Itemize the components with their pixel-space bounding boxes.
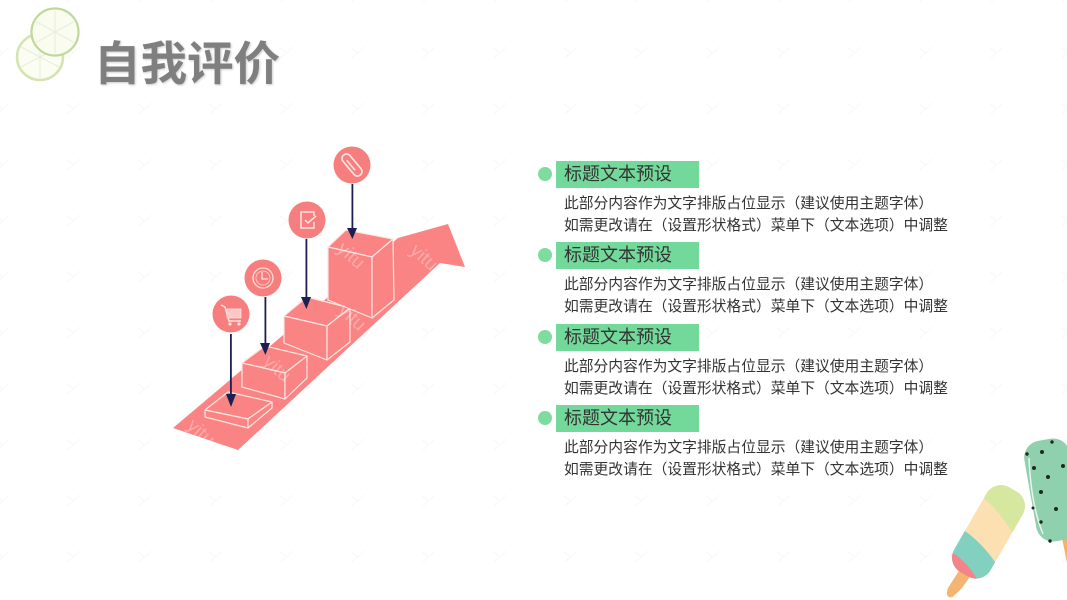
list item 2: 如需更改请在（设置形状格式）菜单下（文本选项）中调整 xyxy=(564,298,948,314)
list item 1: 如需更改请在（设置形状格式）菜单下（文本选项）中调整 xyxy=(564,218,948,234)
icon: popsicle right xyxy=(1021,436,1067,563)
icon: lime slices xyxy=(17,8,78,80)
list item 2: 标题文本预设 xyxy=(564,245,672,265)
pointer arrow 4 xyxy=(347,184,357,239)
pointer arrow 2 xyxy=(260,297,270,355)
list item 3: 此部分内容作为文字排版占位显示（建议使用主题字体） xyxy=(564,359,933,375)
watermarks: yitu xyxy=(406,240,442,276)
step 2 xyxy=(242,346,307,399)
watermarks: yitu xyxy=(334,300,370,336)
growth arrow with steps xyxy=(173,224,465,451)
icon: shopping cart xyxy=(212,296,250,332)
list item 2 xyxy=(538,242,948,314)
list item 3 xyxy=(538,324,948,396)
icon: checklist xyxy=(288,202,326,238)
icon: paperclip xyxy=(334,146,370,184)
pointer arrow 3 xyxy=(301,239,311,309)
step 4 xyxy=(328,230,394,318)
step 3 xyxy=(284,297,350,360)
watermarks: yitu xyxy=(333,238,369,274)
icon: clock xyxy=(244,260,282,296)
watermarks xyxy=(183,238,442,451)
list item 1: 此部分内容作为文字排版占位显示（建议使用主题字体） xyxy=(564,196,933,212)
watermarks: yitu xyxy=(183,415,219,451)
list item 4: 此部分内容作为文字排版占位显示（建议使用主题字体） xyxy=(564,440,933,456)
title: 自我评价 xyxy=(94,38,280,90)
list item 2: 此部分内容作为文字排版占位显示（建议使用主题字体） xyxy=(564,277,933,293)
watermarks: yitu xyxy=(259,351,295,387)
list item 1: 标题文本预设 xyxy=(564,164,672,184)
icon: popsicle left xyxy=(946,485,1025,598)
list item 3: 如需更改请在（设置形状格式）菜单下（文本选项）中调整 xyxy=(564,380,948,396)
list item 3: 标题文本预设 xyxy=(564,327,672,347)
pointer arrow 1 xyxy=(226,334,236,407)
list item 4: 标题文本预设 xyxy=(564,408,672,428)
arrow base xyxy=(173,224,465,450)
step 1 xyxy=(205,392,272,428)
list item 1 xyxy=(538,161,948,234)
list item 4: 如需更改请在（设置形状格式）菜单下（文本选项）中调整 xyxy=(564,462,948,478)
list item 4 xyxy=(538,405,948,478)
